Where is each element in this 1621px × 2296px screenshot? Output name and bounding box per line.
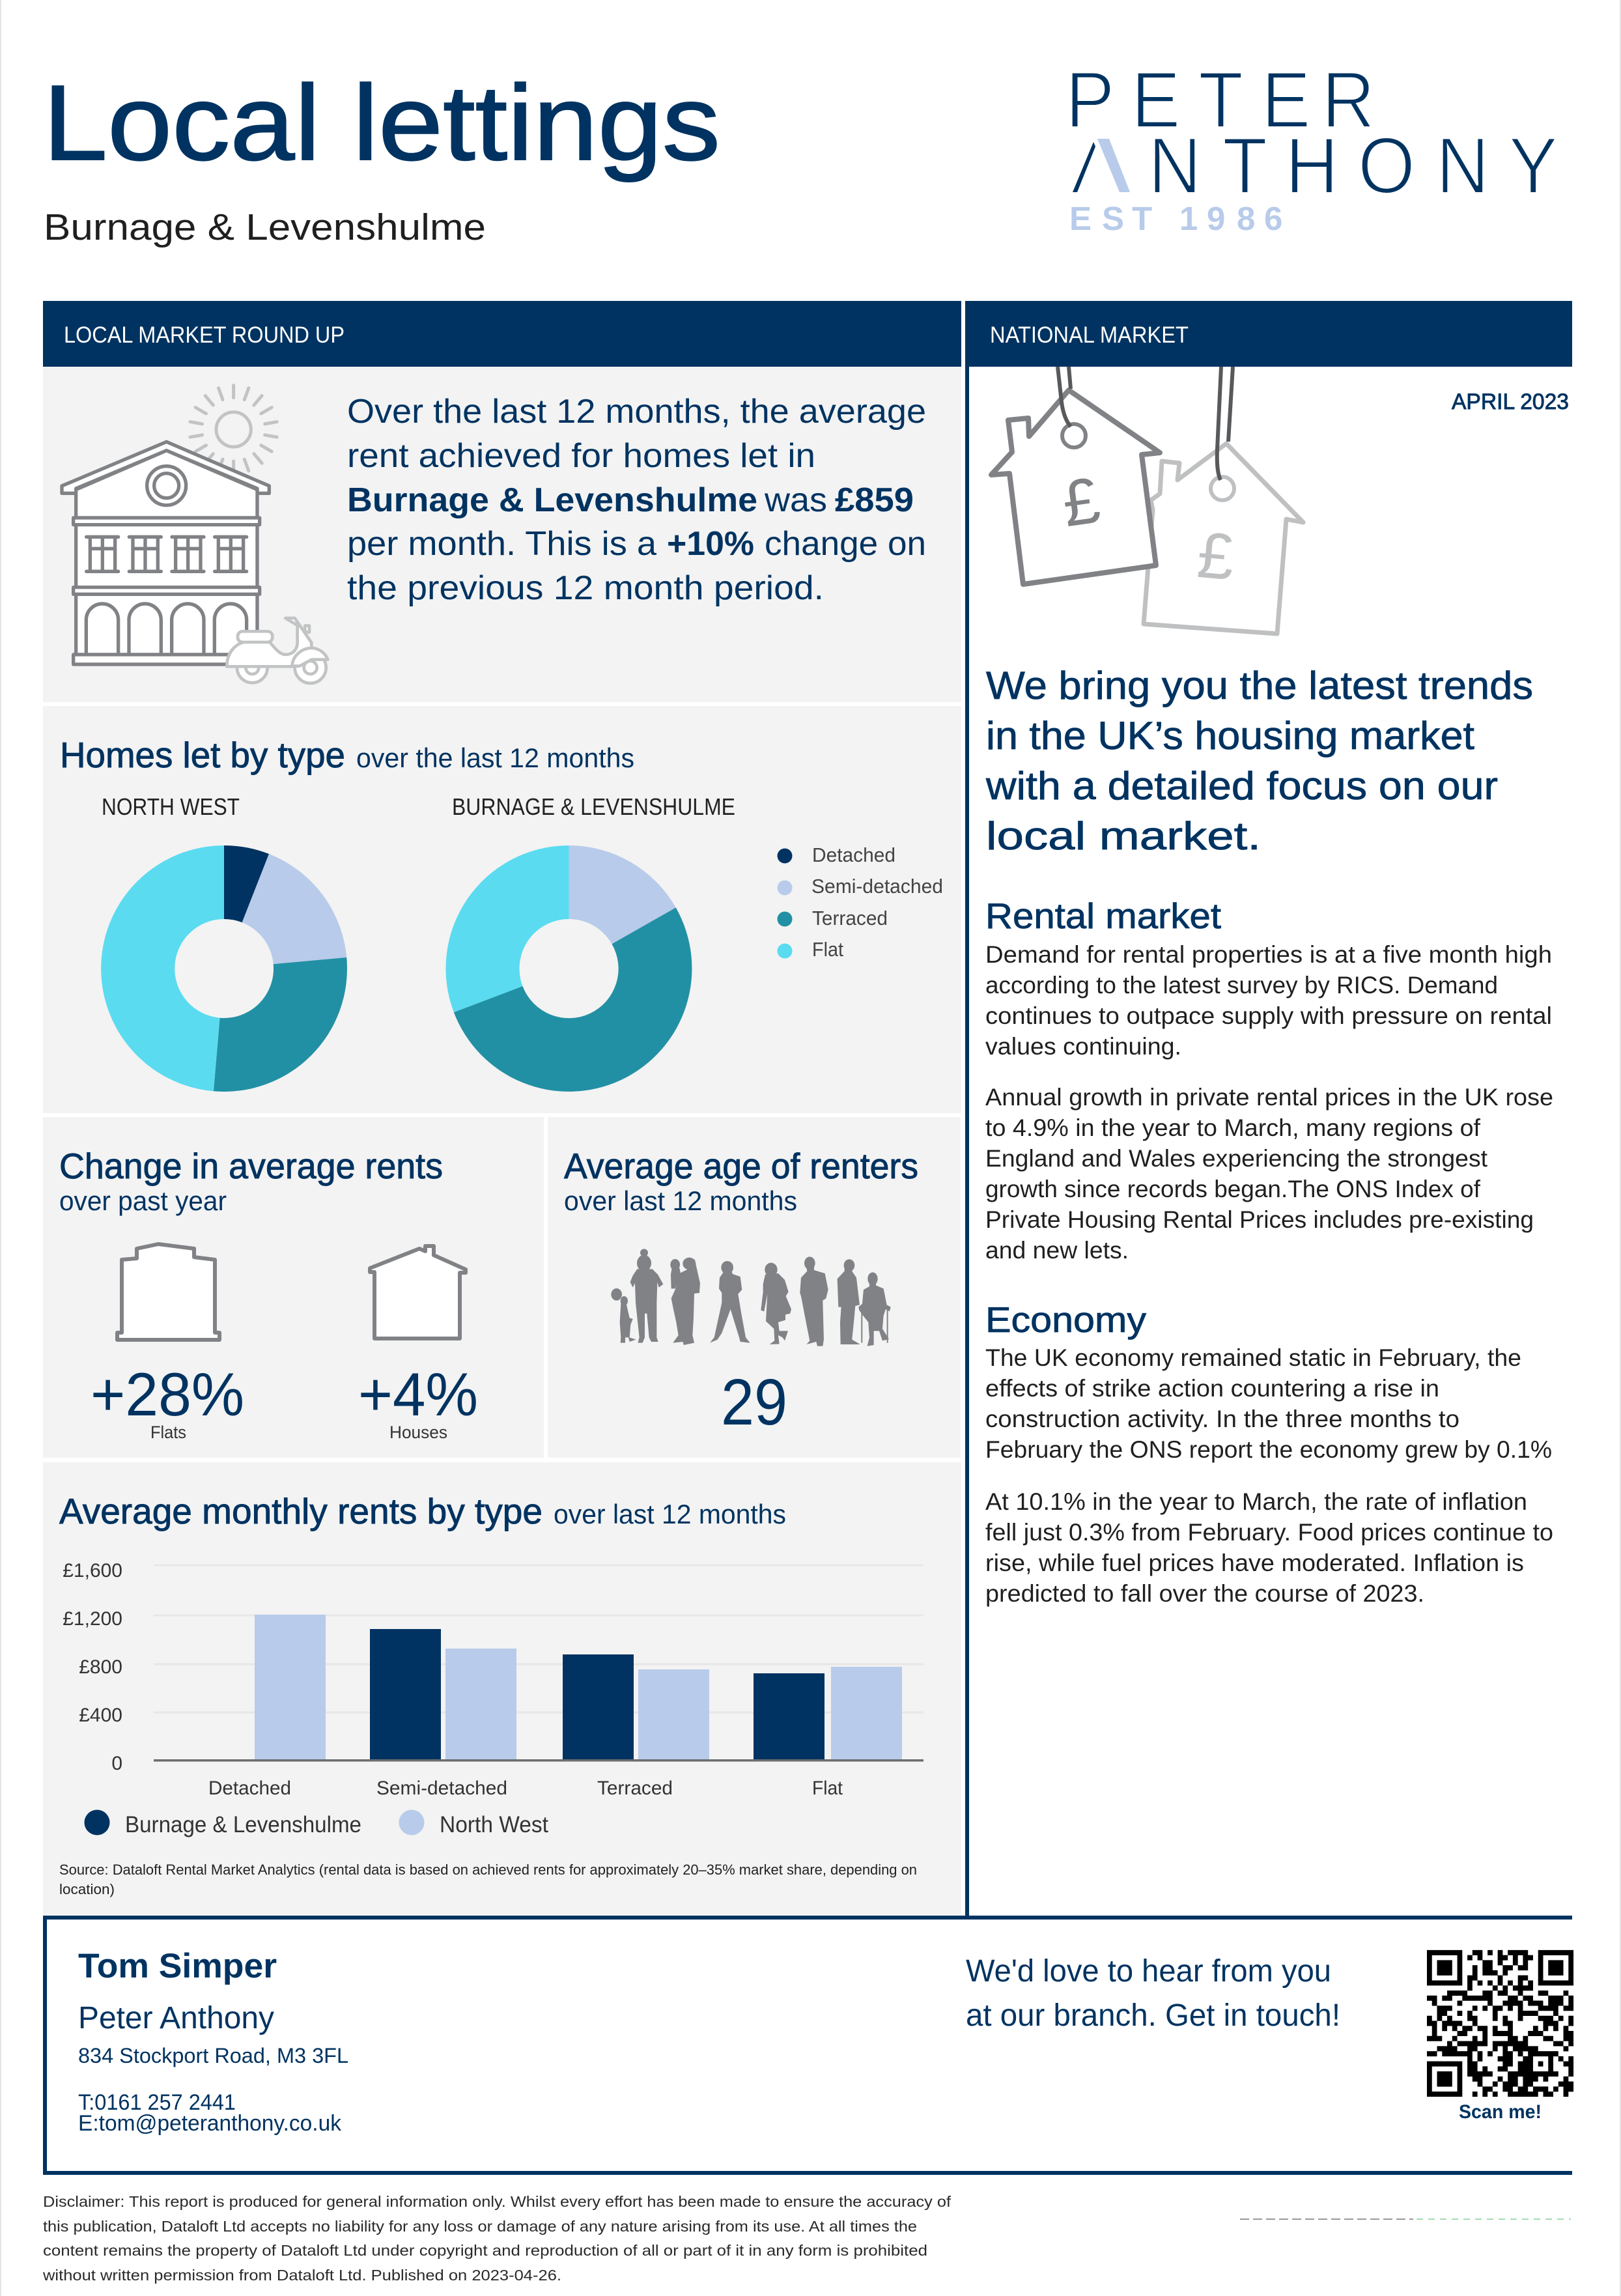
stat: houses change: +4%: [358, 1360, 478, 1428]
legend: property types: Semi-detached: [811, 875, 943, 898]
text block: rent summary: was: [764, 481, 827, 519]
panel: change in average rents: [43, 1117, 544, 1458]
heading: rental market: Rental market: [985, 896, 1221, 936]
text block: rental market paragraph 2: growth since records began.The ONS Index of: [985, 1176, 1481, 1202]
y axis labels: £1,200: [63, 1608, 122, 1630]
call to action: [966, 1954, 1340, 2033]
text block: economy paragraph 2: predicted to fall over the course of 2023.: [985, 1580, 1424, 1607]
y axis labels: 0: [111, 1753, 122, 1774]
x axis labels: Flat: [812, 1778, 843, 1799]
label: burnage and levenshulme: BURNAGE & LEVENSHULME: [452, 793, 735, 820]
heading: homes let by type: [60, 735, 634, 775]
heading: average age of renters: Average age of renters: [564, 1146, 918, 1186]
text block: rental market paragraph 2: [985, 1084, 1553, 1264]
label: north west: NORTH WEST: [102, 793, 240, 820]
text block: rent summary: per month. This is a: [347, 525, 656, 563]
intro heading: We bring you the latest trends: [986, 664, 1533, 707]
panel: national market: [985, 367, 1569, 1607]
text block: rent summary: Over the last 12 months, the average: [347, 393, 926, 431]
logo: Peter Anthony est 1986: A NTHONY: [1072, 121, 1558, 211]
text block: rental market paragraph 1: values continuing.: [985, 1033, 1181, 1060]
legend: property types: Terraced: [812, 907, 888, 929]
text block: rent summary: Burnage & Levenshulme: [347, 481, 757, 519]
donut chart: north west: [101, 845, 347, 1092]
call to action: at our branch. Get in touch!: [966, 1998, 1340, 2033]
stat: flats change: Flats: [150, 1423, 186, 1442]
heading: average monthly rents: over last 12 months: [554, 1499, 786, 1529]
icon: pale house price tag behind: £: [1194, 518, 1237, 594]
text block: economy paragraph 2: rise, while fuel prices have moderated. Inflation is: [985, 1550, 1524, 1576]
contact name: Tom Simper: [78, 1947, 277, 1985]
date label: APRIL 2023: [1452, 390, 1569, 414]
logo: Peter Anthony est 1986: EST 1986: [1069, 200, 1282, 237]
text block: rental market paragraph 1: [985, 941, 1552, 1060]
panel: contact footer: [43, 1916, 1573, 2175]
text block: economy paragraph 1: construction activity. In the three months to: [985, 1406, 1459, 1432]
x axis labels: [208, 1778, 843, 1799]
title: Local lettings: [43, 63, 720, 182]
icon: house price tag front: £: [1058, 464, 1104, 541]
phone and email: [78, 2090, 342, 2136]
text block: rental market paragraph 1: continues to outpace supply with pressure on rental: [985, 1002, 1552, 1029]
x axis labels: Detached: [208, 1778, 291, 1799]
x axis labels: Terraced: [597, 1778, 673, 1799]
subtitle: area name: Burnage & Levenshulme: [44, 206, 486, 248]
text block: economy paragraph 1: effects of strike action countering a rise in: [985, 1375, 1439, 1402]
text block: rental market paragraph 2: Private Housing Rental Prices includes pre-existing: [985, 1206, 1534, 1233]
source note: [59, 1862, 917, 1897]
heading: homes let by type: over the last 12 months: [356, 743, 634, 773]
legend: property types: [778, 843, 943, 961]
text block: rental market paragraph 2: and new lets.: [985, 1237, 1129, 1264]
logo: Peter Anthony est 1986: PETER: [1065, 55, 1375, 145]
icon: pale house price tag behind: [1144, 367, 1303, 634]
panel: average age of renters: [548, 1117, 961, 1458]
disclaimer: this publication, Dataloft Ltd accepts no liability for any loss or damage of any nature arising from its use. At all times the: [43, 2218, 917, 2235]
text block: rental market paragraph 2: Annual growth in private rental prices in the UK rose: [985, 1084, 1553, 1111]
heading: average age of renters: over last 12 months: [564, 1185, 797, 1216]
text block: economy paragraph 1: The UK economy remained static in February, the: [985, 1344, 1521, 1371]
QR code: [1427, 1953, 1573, 2094]
phone and email: E:tom@peteranthony.co.uk: [78, 2111, 342, 2136]
stat: average age: 29: [721, 1366, 787, 1439]
text block: economy paragraph 2: fell just 0.3% from February. Food prices continue to: [985, 1519, 1553, 1546]
text block: rent summary: [347, 393, 926, 607]
legend: property types: Flat: [812, 938, 843, 961]
section header: national market: [965, 301, 1572, 367]
source note: Source: Dataloft Rental Market Analytics (rental data is based on achieved rents for approximately 20–35% market share, depending on: [59, 1862, 917, 1878]
intro heading: [985, 664, 1533, 858]
bars: terraced: [563, 1654, 709, 1760]
bars: semi-detached: [370, 1629, 516, 1760]
icon: house price tag front: [991, 367, 1160, 584]
bars: flat: [754, 1667, 902, 1760]
QR caption: Scan me!: [1459, 2101, 1542, 2123]
text block: rental market paragraph 2: to 4.9% in the year to March, many regions of: [985, 1114, 1481, 1141]
heading: average age of renters: [564, 1146, 918, 1216]
legend: area: [85, 1809, 548, 1837]
text block: rent summary: £859: [835, 481, 914, 519]
intro heading: in the UK’s housing market: [986, 714, 1474, 758]
icon: flats: [117, 1244, 219, 1340]
text block: rental market paragraph 1: Demand for rental properties is at a five month high: [985, 941, 1552, 968]
heading: average monthly rents: Average monthly rents by type: [59, 1491, 543, 1531]
section header: local market round up: [43, 301, 961, 367]
icon: house: [370, 1246, 466, 1339]
donut chart: burnage and levenshulme: [445, 845, 692, 1092]
text block: rent summary: change on: [765, 525, 926, 563]
logo: Peter Anthony est 1986: [1065, 55, 1558, 237]
text block: rent summary: rent achieved for homes let in: [347, 437, 815, 475]
intro heading: with a detailed focus on our: [985, 764, 1498, 808]
panel: homes let by type: [43, 706, 961, 1113]
bars: detached: [255, 1615, 326, 1760]
icon: silhouettes of people: [611, 1249, 891, 1346]
text block: rental market paragraph 1: according to the latest survey by RICS. Demand: [985, 972, 1498, 999]
panel: average monthly rents by type: [43, 1462, 961, 1916]
intro heading: local market.: [986, 814, 1261, 858]
disclaimer: [42, 2193, 951, 2284]
call to action: We'd love to hear from you: [966, 1954, 1331, 1989]
y axis labels: [63, 1560, 122, 1774]
text block: rental market paragraph 2: England and Wales experiencing the strongest: [985, 1145, 1488, 1172]
y axis labels: £400: [79, 1705, 122, 1726]
heading: change in average rents: over past year: [59, 1185, 227, 1216]
disclaimer: content remains the property of Dataloft Ltd under copyright and reproduction of all or part of it in any form is prohibited: [43, 2242, 927, 2259]
heading: average monthly rents: [59, 1491, 786, 1531]
heading: change in average rents: [59, 1146, 443, 1216]
text block: economy paragraph 2: At 10.1% in the year to March, the rate of inflation: [985, 1488, 1527, 1515]
text block: economy paragraph 2: [985, 1488, 1553, 1607]
section header: local market round up: LOCAL MARKET ROUND UP: [64, 322, 345, 348]
phone and email: T:0161 257 2441: [78, 2090, 236, 2115]
heading: homes let by type: Homes let by type: [60, 735, 345, 775]
y axis labels: £800: [79, 1656, 122, 1678]
disclaimer: without written permission from Dataloft Ltd. Published on 2023-04-26.: [42, 2267, 561, 2284]
text block: economy paragraph 1: [985, 1344, 1552, 1463]
company name: Peter Anthony: [78, 2001, 274, 2035]
panel: local rent summary: [43, 367, 961, 702]
legend: area: North West: [440, 1812, 548, 1837]
icon: building with sun and scooter: [62, 386, 328, 683]
text block: economy paragraph 1: February the ONS report the economy grew by 0.1%: [985, 1436, 1552, 1463]
legend: area: Burnage & Levenshulme: [125, 1812, 361, 1837]
heading: economy: Economy: [985, 1299, 1147, 1340]
source note: location): [59, 1881, 115, 1897]
y axis labels: £1,600: [63, 1560, 122, 1581]
bar chart: rents by type: [63, 1560, 923, 1799]
x axis labels: Semi-detached: [376, 1778, 507, 1799]
text block: rent summary: +10%: [667, 525, 754, 563]
disclaimer: Disclaimer: This report is produced for general information only. Whilst every effort has been made to ensure the accuracy of: [43, 2193, 951, 2210]
address: 834 Stockport Road, M3 3FL: [78, 2044, 348, 2067]
text block: rent summary: the previous 12 month period.: [347, 569, 824, 607]
legend: property types: Detached: [812, 843, 895, 866]
stat: flats change: +28%: [91, 1360, 244, 1428]
section header: national market: NATIONAL MARKET: [990, 322, 1189, 348]
heading: change in average rents: Change in average rents: [59, 1146, 443, 1186]
stat: houses change: Houses: [389, 1423, 447, 1442]
